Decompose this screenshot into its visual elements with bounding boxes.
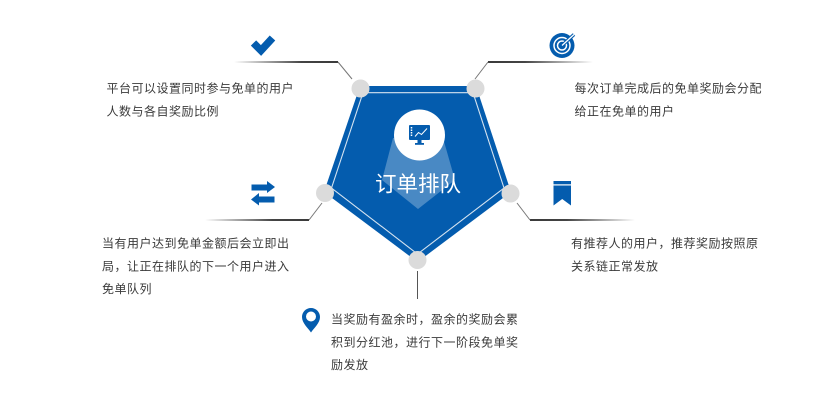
light beam <box>382 138 455 209</box>
icon: bookmark <box>554 181 571 206</box>
icon: location pin <box>302 308 320 332</box>
connector: top left <box>234 61 352 79</box>
icon: monitor chart <box>409 125 430 145</box>
text: right: 有推荐人的用户，推荐奖励按照原 <box>571 236 759 250</box>
text: right: 关系链正常发放 <box>571 258 659 274</box>
central pentagon <box>324 86 511 262</box>
icon: target <box>550 33 574 58</box>
text: top left: 平台可以设置同时参与免单的用户 <box>106 80 294 96</box>
text: top right: 给正在免单的用户 <box>574 104 675 118</box>
icon: check mark <box>254 38 272 50</box>
connector: top right <box>475 61 593 79</box>
text: bottom: 励发放 <box>331 357 369 372</box>
text: left: 局，让正在排队的下一个用户进入 <box>102 258 290 274</box>
text: top left: 人数与各自奖励比例 <box>106 104 219 118</box>
pentagon body <box>324 86 511 262</box>
text: top right: 每次订单完成后的免单奖励会分配 <box>574 80 762 96</box>
connector: bottom <box>416 271 418 299</box>
text: left: 免单队列 <box>102 281 152 296</box>
text: bottom: 积到分红池，进行下一阶段免单奖 <box>331 334 519 350</box>
center title: 订单排队 <box>375 172 461 196</box>
text: left: 当有用户达到免单金额后会立即出 <box>102 236 290 250</box>
connector: left <box>205 203 322 221</box>
icon: swap arrows <box>251 181 275 206</box>
pentagon inner outline <box>332 93 504 254</box>
connector: right <box>517 203 635 221</box>
node circles <box>316 80 520 269</box>
text: bottom: 当奖励有盈余时，盈余的奖励会累 <box>331 312 519 326</box>
icon circle <box>394 110 445 160</box>
